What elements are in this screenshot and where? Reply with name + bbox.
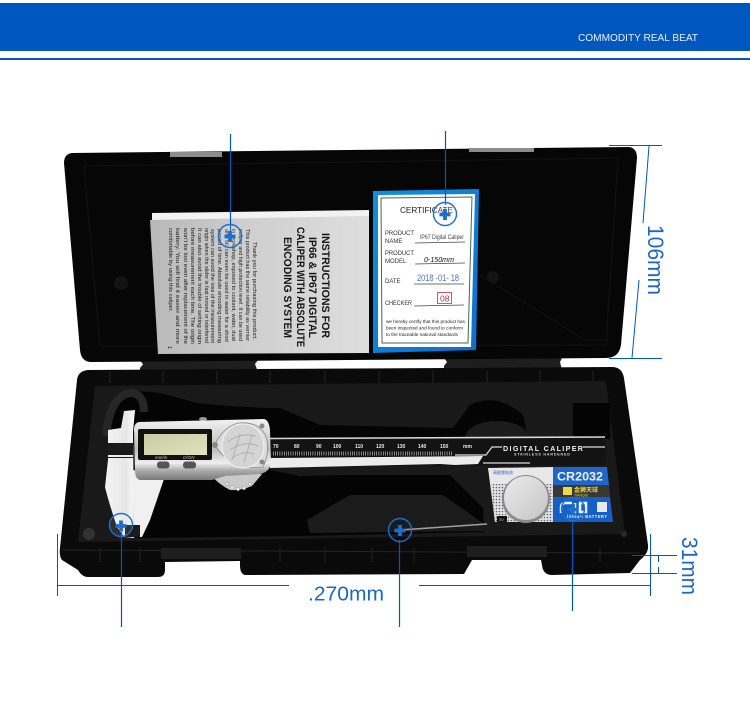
upper cavity <box>108 391 528 445</box>
main beam: STAINLESS HARDENED <box>514 452 570 456</box>
instruction leaflet <box>150 210 369 354</box>
leaflet body text: won't be lost even after replacement of the <box>182 227 188 344</box>
caliper: O/ON <box>183 455 195 460</box>
certificate card: 2018 -01- 18 <box>417 273 459 284</box>
main beam: 110 <box>355 444 363 450</box>
main beam: 150 <box>440 444 449 450</box>
case lid <box>64 147 637 362</box>
case hinge left <box>140 356 258 372</box>
leaflet title: ENCODING SYSTEM <box>281 237 293 338</box>
leaflet body text: It can also avoid the trouble of setting origin <box>196 228 202 344</box>
case hinge right <box>444 354 562 370</box>
certificate fields: PRODUCT <box>385 251 414 257</box>
leaflet body text <box>166 227 257 349</box>
screw on top <box>199 417 207 421</box>
leaflet body text: Thank you for purchasing this product. <box>251 242 257 340</box>
certificate card: 0-150mm <box>424 255 454 264</box>
marker: depth rod <box>388 518 412 627</box>
leaflet body text: This product has the same reliability as vernier <box>244 229 250 341</box>
dimension: depth 31mm <box>632 537 702 595</box>
base rim ribs <box>62 371 640 562</box>
leaflet body text: and oil, can even be used in water for a short <box>223 229 229 342</box>
thumb wheel <box>210 474 262 491</box>
header rule <box>0 58 750 60</box>
leaflet body text: battery. You will find it easier and more <box>174 228 180 344</box>
slider housing <box>134 419 271 480</box>
certificate fields: PRODUCT <box>385 231 414 237</box>
leaflet body text: period of time. Absolute encoding measuring <box>216 229 222 343</box>
certificate statement: to the traceable national standards <box>386 332 459 337</box>
scale marks <box>273 452 452 456</box>
leaflet body text: in workshop, exposed to coolant, water, dust <box>230 229 236 341</box>
coin cell <box>502 475 550 523</box>
battery type text: lithium BATTERY <box>567 514 607 519</box>
main beam: 90 <box>316 444 322 450</box>
header band <box>0 3 750 51</box>
LCD frame <box>138 429 212 460</box>
certificate statement <box>386 319 466 337</box>
lid inner mouldings <box>84 158 618 346</box>
tray recess <box>78 381 625 542</box>
leaflet title: CALIPER WITH ABSOLUTE <box>294 227 306 347</box>
case base <box>60 367 648 577</box>
certificate fields: NAME <box>385 239 402 245</box>
leaflet title <box>281 227 331 347</box>
button labels: mm/in <box>155 455 168 460</box>
leaflet body text: before measurement each time. The origin <box>189 228 195 344</box>
certificate card: 08 <box>440 294 450 304</box>
jaw arc moulding <box>106 393 144 436</box>
battery card: 高能锂电池 <box>493 469 513 475</box>
main beam: 120 <box>376 444 385 450</box>
buttons <box>157 462 170 468</box>
battery model label: CR2032 <box>557 472 603 484</box>
width label: .270mm <box>308 584 384 606</box>
depth rod <box>400 524 487 530</box>
right cavity <box>573 403 610 439</box>
leaflet title: INSTRUCTIONS FOR <box>319 233 331 338</box>
header caption: COMMODITY REAL BEAT <box>578 32 699 44</box>
certificate card <box>373 189 479 353</box>
leaflet title: IP66 & IP67 DIGITAL <box>306 237 318 338</box>
certificate fields: CHECKER <box>385 301 413 307</box>
leaflet body text: system can avoid the loss of the measurement <box>209 229 215 343</box>
sliding jaw <box>133 470 165 537</box>
lid latch tabs <box>170 148 534 157</box>
main beam: 130 <box>397 444 406 450</box>
main beam: mm <box>463 444 472 450</box>
certificate statement: we hereby certify that this product has <box>386 319 466 324</box>
certificate heading: CERTIFICATE <box>400 206 454 215</box>
battery card <box>488 467 613 523</box>
depth label: 31mm <box>677 537 702 595</box>
leaflet body text: comfortable by using this caliper. <box>167 228 173 312</box>
marker: jaw <box>110 514 132 627</box>
leaflet body text: origin when the slider is fast moved or interfered <box>203 228 209 343</box>
lower cavity <box>108 470 484 538</box>
main beam: 80 <box>294 444 300 450</box>
battery brand: 金狮天球 <box>574 486 598 494</box>
main beam: 140 <box>418 444 427 450</box>
certificate statement: been inspected and found to conform <box>386 326 463 330</box>
certificate fields: DATE <box>385 279 401 285</box>
certificate card: IP67 Digital Caliper <box>420 235 464 241</box>
dimension: height 106mm <box>609 146 668 358</box>
main beam: 70 <box>273 444 279 450</box>
marker: leaflet <box>218 134 242 248</box>
battery card: 3V <box>499 517 504 522</box>
marker: battery <box>562 498 584 611</box>
main beam <box>108 437 606 468</box>
brand lettering: DIGITAL CALIPER <box>503 444 584 453</box>
leaflet body text: caliper and high protection level. It can be used <box>237 229 243 341</box>
main beam: 100 <box>333 444 342 450</box>
height label: 106mm <box>643 225 668 295</box>
logo medallion <box>215 423 268 468</box>
certificate fields <box>385 231 414 307</box>
marker: certificate <box>434 131 456 226</box>
fixed jaw <box>105 410 135 538</box>
leaflet body text: 1 <box>166 346 172 349</box>
dimension: width 270mm <box>57 534 650 606</box>
caliper <box>105 410 606 538</box>
certificate fields: MODEL <box>385 259 407 265</box>
battery brand: TIANQIU <box>574 494 589 498</box>
battery brand <box>563 486 598 498</box>
